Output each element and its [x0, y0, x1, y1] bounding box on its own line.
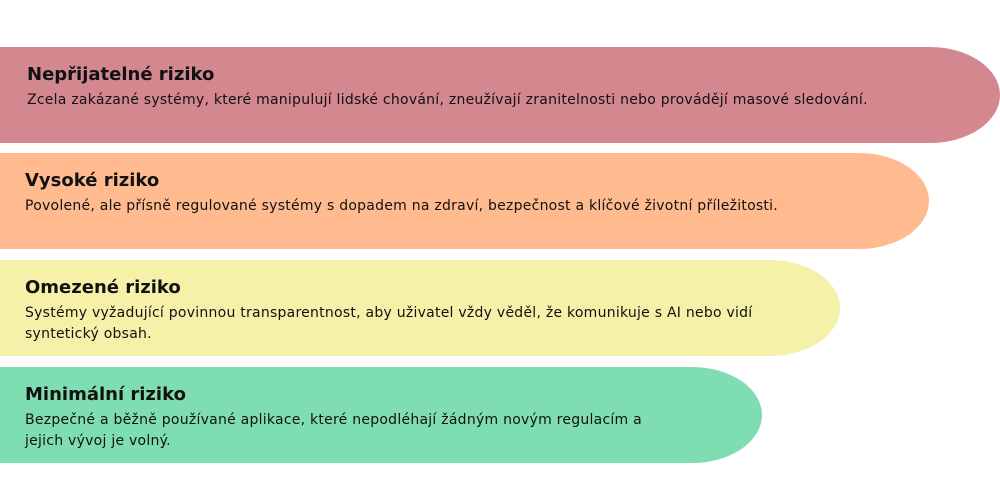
heading: Vysoké riziko: [25, 170, 159, 191]
heading: Omezené riziko: [25, 277, 181, 298]
panel: high risk: [0, 153, 929, 249]
panel: unacceptable risk: [0, 47, 1000, 143]
text block: Bezpečné a běžně používané aplikace, které nepodléhají žádným novým regulacím a jejich vývoj je volný.: [25, 412, 642, 449]
panel: limited risk: [0, 260, 840, 356]
heading: Nepřijatelné riziko: [27, 64, 214, 85]
text block: Zcela zakázané systémy, které manipulují lidské chování, zneužívají zranitelnosti nebo provádějí masové sledování.: [27, 92, 868, 108]
heading: Minimální riziko: [25, 384, 186, 405]
text block: Systémy vyžadující povinnou transparentnost, aby uživatel vždy věděl, že komunikuje s AI nebo vidí syntetický obsah.: [25, 305, 752, 342]
text block: Povolené, ale přísně regulované systémy s dopadem na zdraví, bezpečnost a klíčové životní příležitosti.: [25, 198, 778, 214]
panel: minimal risk: [0, 367, 762, 463]
